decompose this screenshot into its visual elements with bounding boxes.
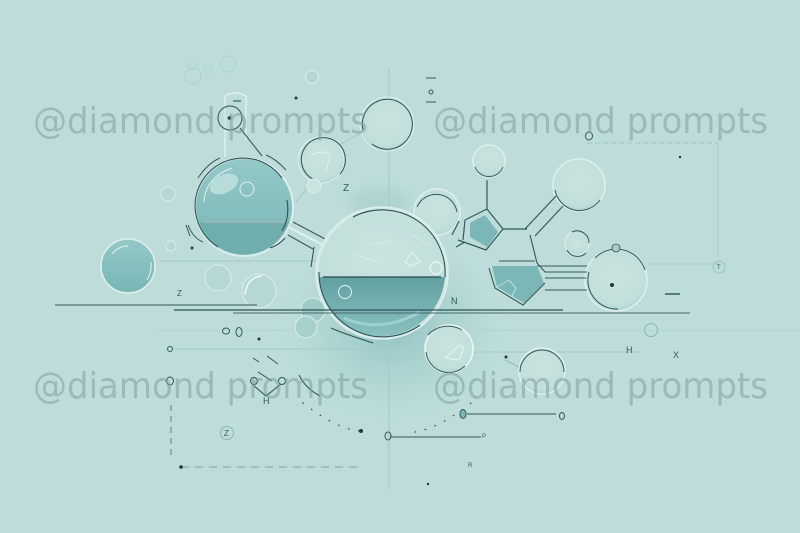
small bubbles lower left — [161, 70, 325, 338]
letter labels: Z — [177, 289, 182, 298]
flask neck — [225, 93, 246, 157]
letter labels: T — [717, 265, 721, 271]
letter labels — [177, 183, 721, 469]
centre bubble behind sphere — [414, 189, 460, 235]
watermarks: @diamond prompts — [33, 366, 368, 407]
faint bubble cluster top left — [185, 56, 236, 84]
molecular illustration canvas — [35, 56, 800, 490]
top bubble — [360, 97, 414, 151]
letter labels: Z — [224, 429, 229, 438]
letter labels: N — [451, 296, 458, 306]
molecule: lower pentagon — [489, 235, 587, 305]
watermarks: @diamond prompts — [433, 101, 768, 142]
letter labels: Z — [343, 183, 349, 194]
watermarks: @diamond prompts — [433, 366, 768, 407]
left sphere — [101, 239, 155, 293]
right bubble top — [473, 145, 505, 177]
central sphere — [316, 207, 448, 341]
drawing group — [55, 56, 800, 490]
letter labels: H — [626, 345, 632, 355]
bond: left flask to centre sphere — [288, 222, 327, 267]
central liquid — [318, 277, 446, 341]
lower bubble — [425, 325, 473, 373]
letter labels: P — [482, 434, 486, 440]
letter labels: R — [468, 463, 473, 469]
long horizontal lines — [55, 294, 690, 437]
faint cloud behind sphere — [348, 188, 412, 216]
right large bubble — [553, 159, 605, 211]
central glow — [262, 215, 522, 435]
letter labels: H — [263, 396, 270, 406]
flask liquid — [200, 222, 288, 254]
left flask sphere — [186, 155, 293, 262]
flask highlight — [207, 170, 241, 198]
guide lines — [154, 68, 800, 490]
dotted arc — [303, 400, 475, 432]
watermarks: @diamond prompts — [33, 101, 368, 142]
right atom bubble — [585, 244, 647, 311]
small atom on flask neck — [218, 106, 242, 130]
small atoms — [166, 78, 725, 440]
watermarks — [33, 101, 768, 407]
small right bubble — [565, 231, 589, 256]
connectors between left flask and top bubbles — [240, 128, 363, 202]
molecule: upper pentagon — [452, 180, 563, 250]
scattered dots — [179, 96, 681, 485]
second bubble — [298, 137, 345, 193]
letter labels: X — [673, 350, 679, 360]
lower right bubble — [505, 348, 565, 394]
